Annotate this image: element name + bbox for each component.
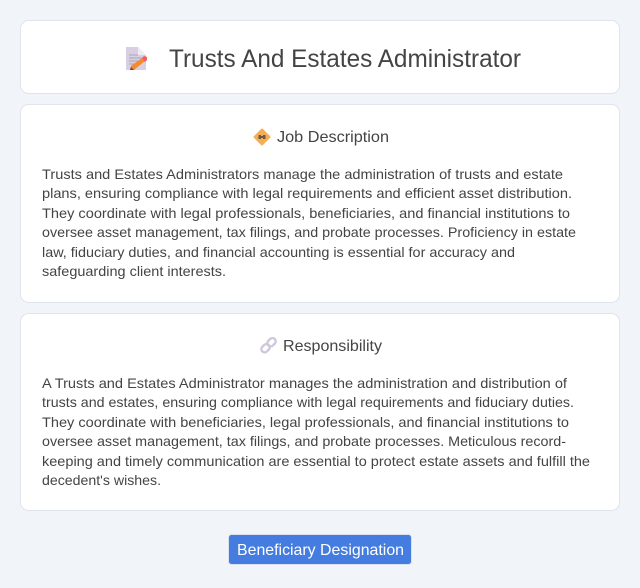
- heading: job description: Job Description: [277, 129, 389, 146]
- text block: responsibility: trusts and estates, ensuring compliance with legal requirements and fiduciary duties.: [42, 394, 574, 410]
- text block: responsibility: They coordinate with beneficiaries, legal professionals, and financial institutions to: [42, 414, 569, 430]
- text block: responsibility: [42, 375, 590, 488]
- panel: job description: [20, 104, 620, 302]
- title: Trusts And Estates Administrator: [169, 45, 521, 73]
- text block: job description: They coordinate with legal professionals, beneficiaries, and financial institutions to: [42, 205, 570, 221]
- text block: responsibility: oversee asset management, tax filings, and probate processes. Meticulous record-: [42, 433, 566, 449]
- text block: job description: safeguarding client interests.: [42, 263, 226, 279]
- text block: job description: oversee asset management, tax filings, and probate processes. Proficiency in estate: [42, 224, 576, 240]
- panel: responsibility: [20, 314, 620, 510]
- text block: responsibility: A Trusts and Estates Administrator manages the administration and distribution of: [42, 375, 567, 391]
- button: beneficiary designation: Beneficiary Designation: [237, 542, 404, 559]
- text block: job description: plans, ensuring compliance with legal requirements and efficient asset distribution.: [42, 185, 572, 201]
- text block: responsibility: keeping and timely communication are essential to protect estate assets and fulfill the: [42, 453, 590, 469]
- panel: title card: [20, 20, 620, 94]
- icon: diamond sign: [254, 130, 270, 144]
- icon: chain link: [260, 337, 277, 354]
- text block: job description: [42, 166, 576, 279]
- button: beneficiary designation: [228, 534, 412, 564]
- heading: responsibility: Responsibility: [283, 338, 382, 355]
- text block: job description: law, fiduciary duties, and financial accounting is essential for accuracy and: [42, 244, 515, 260]
- text block: responsibility: decedent's wishes.: [42, 472, 161, 488]
- icon: document with pencil: [126, 47, 147, 70]
- text block: job description: Trusts and Estates Administrators manage the administration of trusts and estate: [42, 166, 563, 182]
